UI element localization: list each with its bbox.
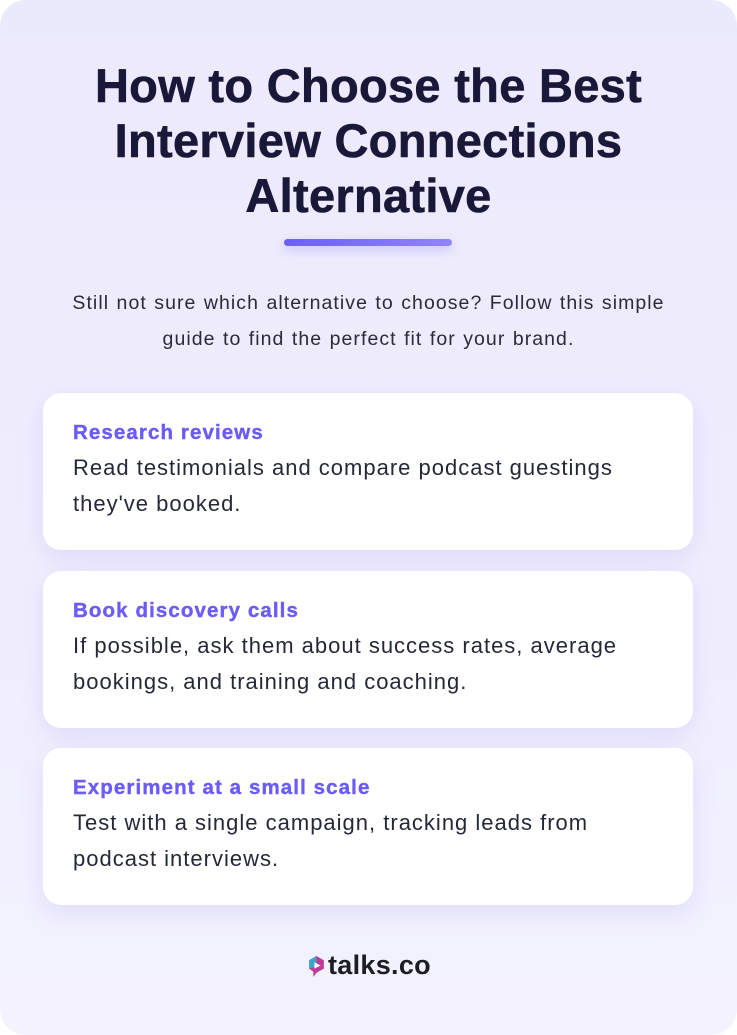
card: research reviews: Read testimonials and compare podcast guestings <box>73 455 613 480</box>
card: research reviews <box>43 393 693 550</box>
card: book discovery calls: If possible, ask them about success rates, average <box>73 633 617 658</box>
card: experiment at a small scale: Test with a single campaign, tracking leads from <box>73 810 588 835</box>
card: experiment at a small scale <box>43 748 693 905</box>
subtitle: guide to find the perfect fit for your brand. <box>163 328 574 350</box>
subtitle: Still not sure which alternative to choose? Follow this simple <box>72 292 665 314</box>
subtitle <box>72 292 665 350</box>
card: experiment at a small scale: Experiment at a small scale <box>73 776 370 799</box>
card: book discovery calls: bookings, and training and coaching. <box>73 669 467 694</box>
title <box>95 59 642 222</box>
card: book discovery calls: Book discovery calls <box>73 599 299 622</box>
title: Interview Connections <box>115 114 622 167</box>
card: research reviews: Research reviews <box>73 421 264 444</box>
logo: talks.co: talks.co <box>328 950 431 980</box>
card: experiment at a small scale: podcast interviews. <box>73 846 279 871</box>
title: How to Choose the Best <box>95 59 642 112</box>
card: research reviews: they've booked. <box>73 491 241 516</box>
icon: logo mark <box>309 956 324 977</box>
title: Alternative <box>245 169 492 222</box>
card: book discovery calls <box>43 571 693 728</box>
accent underline bar <box>284 239 452 246</box>
